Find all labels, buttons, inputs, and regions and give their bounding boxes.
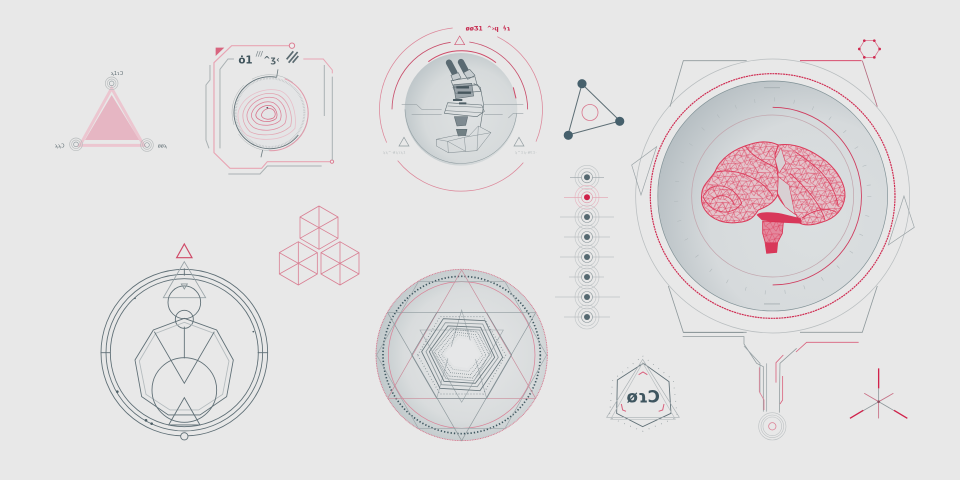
right caption: ϡ^1ϡ·øƐ1· bbox=[515, 150, 537, 154]
disc ring dark bbox=[234, 77, 298, 149]
small down triangle bbox=[181, 284, 187, 289]
isometric cubes bbox=[279, 206, 359, 285]
hub bbox=[877, 400, 880, 403]
disc pointers bbox=[261, 69, 278, 157]
stem mesh bbox=[763, 221, 783, 253]
right mesh bbox=[775, 144, 845, 225]
upward triangle bbox=[388, 270, 536, 398]
left tab bbox=[632, 147, 657, 195]
inner thin ring bbox=[692, 115, 854, 277]
chevron bbox=[154, 332, 214, 383]
stage knobs bbox=[453, 100, 466, 103]
body circle bbox=[152, 358, 217, 422]
dotted outer hex bbox=[609, 356, 677, 431]
dial caps bbox=[658, 88, 780, 304]
disc bbox=[405, 53, 517, 166]
brain bbox=[701, 142, 845, 253]
target 8 bbox=[564, 305, 610, 329]
central fissure bbox=[775, 148, 795, 214]
red spoke tips bbox=[850, 368, 907, 418]
orbit dots bbox=[116, 297, 254, 425]
red ring bbox=[582, 104, 598, 120]
target 6 bbox=[569, 265, 604, 289]
grey spokes bbox=[850, 388, 907, 418]
base bbox=[436, 126, 491, 153]
nosepiece dark bbox=[456, 87, 471, 93]
triangle frame bbox=[80, 88, 144, 145]
red triangle bbox=[177, 244, 192, 258]
head bbox=[451, 77, 477, 87]
outer ring bbox=[636, 59, 910, 333]
cerebellum band bbox=[757, 212, 802, 224]
triangle top bbox=[455, 36, 465, 45]
nosepiece bbox=[454, 83, 474, 99]
red dashed ring bbox=[650, 74, 895, 318]
right mesh overlay bbox=[775, 144, 845, 225]
disc bbox=[376, 269, 547, 441]
hexagon marker bbox=[858, 39, 881, 59]
star medallion bbox=[376, 269, 547, 441]
tri-star icon bbox=[850, 368, 907, 418]
disc bbox=[658, 81, 888, 311]
frame top right bbox=[862, 61, 877, 107]
neck circle bbox=[175, 310, 193, 328]
disc ring light bbox=[232, 75, 308, 151]
gyri curves bbox=[703, 146, 838, 220]
node left bbox=[70, 138, 82, 151]
node top bbox=[105, 77, 118, 90]
circuit end rings bbox=[289, 43, 334, 163]
connector under scanner bbox=[683, 333, 859, 440]
target 4 bbox=[564, 225, 610, 249]
outer rings bbox=[101, 269, 268, 436]
brain scanner bbox=[632, 39, 914, 333]
triangle left bbox=[399, 137, 409, 146]
emblem text: øɿƆ bbox=[627, 388, 660, 407]
left rail bbox=[744, 346, 767, 412]
disc ring red bbox=[269, 79, 308, 151]
brain stem bbox=[763, 221, 783, 253]
triangle inner bbox=[611, 363, 675, 419]
cube right bbox=[321, 242, 359, 285]
red rail right bbox=[776, 342, 859, 404]
frame bottom rails bbox=[683, 333, 763, 412]
target 2 red bbox=[564, 185, 608, 209]
head circle bbox=[168, 286, 201, 319]
contour map panel bbox=[206, 43, 334, 174]
outer red arcs bbox=[380, 28, 542, 191]
node right bbox=[141, 139, 153, 151]
label top: ϡ1ɿƆ bbox=[111, 71, 124, 77]
disc top red arc bbox=[428, 51, 516, 98]
stem tip bbox=[766, 242, 778, 253]
inner red ring bbox=[388, 282, 535, 428]
right rail bbox=[779, 348, 797, 413]
panel heading: ȯ1 bbox=[238, 54, 253, 66]
port rings bbox=[759, 413, 786, 440]
triangle links bbox=[568, 84, 620, 135]
medallion heading: øøƷ1 ^›ϥ ϟɿ bbox=[466, 25, 511, 32]
cube top bbox=[300, 206, 338, 249]
dotted dark ring bbox=[383, 276, 540, 434]
right tab bbox=[888, 196, 914, 245]
cube left bbox=[279, 242, 317, 285]
left caption: ϡϡ^·øϡɿϡ1 bbox=[383, 150, 406, 154]
crosshair lines bbox=[402, 105, 523, 118]
downward triangle bbox=[388, 313, 536, 441]
grey circuit lines bbox=[206, 59, 332, 174]
microscope bbox=[436, 62, 491, 153]
contour lines bbox=[238, 90, 295, 139]
bottom ring bbox=[181, 433, 188, 440]
base triangle bbox=[169, 398, 200, 425]
pink circuit frame bbox=[214, 46, 330, 168]
hexagon bbox=[617, 363, 671, 427]
triangle frame bbox=[607, 359, 679, 417]
target 1 bbox=[570, 165, 604, 189]
port red ring bbox=[769, 423, 776, 430]
hexagon emblem bbox=[607, 356, 679, 431]
inner nonagon bbox=[139, 322, 229, 410]
middle triangles bbox=[420, 310, 503, 402]
triangle fill bbox=[85, 95, 139, 140]
left mesh overlay bbox=[701, 142, 778, 223]
eyepieces bbox=[449, 62, 466, 73]
left mesh bbox=[701, 142, 778, 223]
node a bbox=[577, 79, 587, 88]
target stack bbox=[555, 165, 620, 329]
lamp bbox=[456, 129, 467, 136]
pink right line bbox=[303, 59, 332, 73]
red arc bbox=[773, 107, 861, 285]
arm bbox=[474, 83, 484, 127]
red rail left bbox=[759, 367, 764, 410]
red fine spokes bbox=[864, 393, 893, 418]
red corners bbox=[621, 372, 664, 411]
centre hexagon bbox=[445, 338, 479, 368]
frame bottom bbox=[668, 286, 877, 332]
target 7 bbox=[555, 285, 620, 309]
triangle right bbox=[514, 137, 524, 146]
right hemisphere bbox=[775, 144, 845, 225]
nested ring figure bbox=[101, 244, 268, 440]
node b bbox=[615, 117, 624, 126]
eyepiece collars bbox=[451, 69, 475, 81]
slashes bbox=[256, 51, 263, 57]
label left: ϡϡƆ bbox=[55, 144, 65, 150]
left hemisphere bbox=[701, 142, 778, 223]
nested hexagons bbox=[422, 319, 503, 391]
stem bbox=[183, 327, 186, 358]
contour centre dot bbox=[266, 107, 268, 108]
target 3 bbox=[560, 205, 614, 229]
microscope medallion bbox=[380, 25, 542, 191]
panel code: ^ʒ‹ bbox=[263, 56, 280, 66]
hatch block bbox=[287, 51, 298, 63]
frame top bbox=[670, 61, 747, 107]
target 5 bbox=[560, 245, 614, 269]
network triangle icon bbox=[564, 79, 624, 140]
disc tick band bbox=[236, 78, 304, 147]
disc rim bbox=[658, 81, 888, 311]
grey triangle bbox=[163, 262, 206, 298]
disc rim bbox=[405, 109, 517, 163]
frame top red bbox=[800, 59, 862, 62]
stage bbox=[444, 103, 484, 117]
contour disc bbox=[234, 77, 306, 149]
outer dotted ring bbox=[376, 269, 547, 441]
corner flag bbox=[216, 48, 224, 56]
outer nonagon bbox=[135, 318, 233, 415]
dotted hexagon bbox=[412, 313, 512, 398]
inner red arcs bbox=[392, 42, 528, 109]
dial ticks bbox=[676, 99, 869, 293]
node c bbox=[564, 131, 573, 140]
label right: øøϡ bbox=[158, 144, 167, 150]
triangle diagram bbox=[55, 71, 167, 151]
objective bbox=[454, 117, 468, 126]
axis ticks bbox=[101, 268, 268, 353]
outer hexagon bbox=[377, 282, 547, 428]
